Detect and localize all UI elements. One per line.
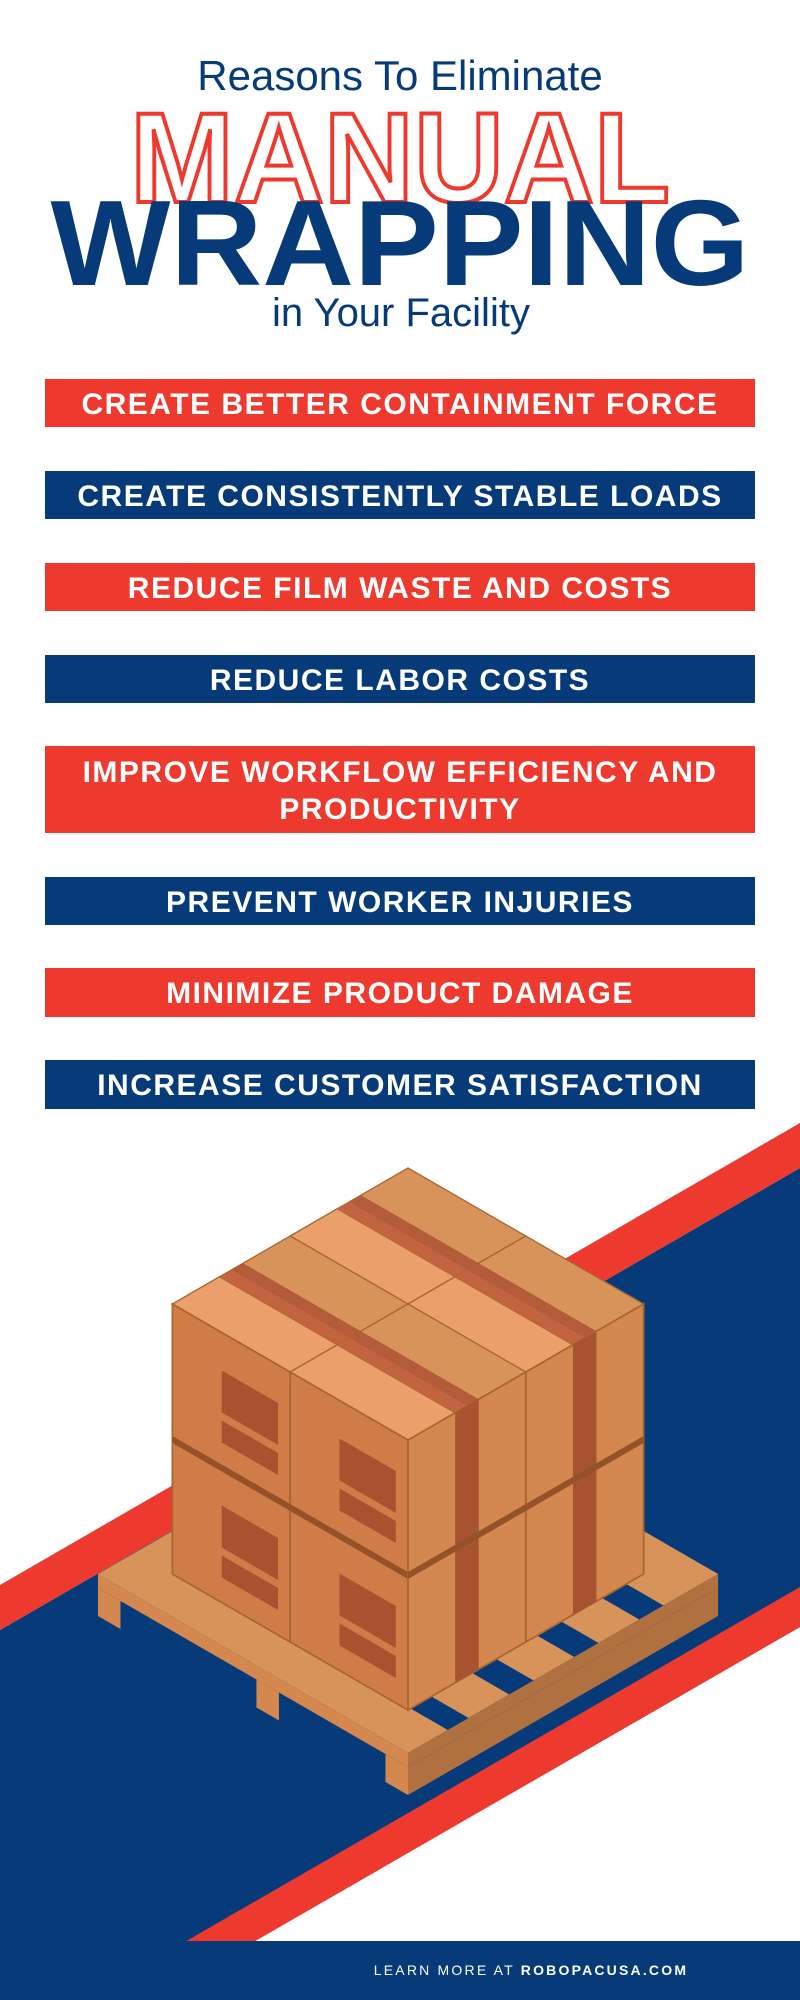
pallet — [98, 1395, 718, 1795]
bar 7 — [45, 968, 755, 1017]
footer text: LEARN MORE AT ROBOPACUSA.COM — [374, 1962, 688, 1978]
bar 8: INCREASE CUSTOMER SATISFACTION — [97, 1069, 703, 1102]
bar 3 — [45, 563, 755, 611]
bar 4: REDUCE LABOR COSTS — [210, 664, 590, 697]
bar 5: PRODUCTIVITY — [279, 793, 521, 826]
illustration: pallet of boxes — [98, 1168, 718, 1795]
heading: WRAPPING: WRAPPING — [50, 175, 750, 311]
bar 6: PREVENT WORKER INJURIES — [166, 886, 634, 919]
boxes top faces — [172, 1168, 644, 1440]
bar 8 — [45, 1060, 755, 1109]
bar 4 — [45, 655, 755, 703]
boxes left faces — [172, 1304, 408, 1710]
bar 2: CREATE CONSISTENTLY STABLE LOADS — [77, 480, 723, 513]
bar 5 — [45, 746, 755, 833]
bar 1: CREATE BETTER CONTAINMENT FORCE — [81, 388, 719, 421]
bar 6 — [45, 877, 755, 925]
bar 3: REDUCE FILM WASTE AND COSTS — [128, 572, 672, 605]
bar 5: IMPROVE WORKFLOW EFFICIENCY AND — [83, 756, 717, 789]
subtitle top: Reasons To Eliminate — [197, 52, 603, 99]
diagonal background stripes — [0, 1123, 800, 2000]
subtitle bottom: in Your Facility — [272, 291, 530, 335]
reasons list — [45, 379, 755, 1109]
bar 2 — [45, 471, 755, 519]
bar 7: MINIMIZE PRODUCT DAMAGE — [166, 977, 634, 1010]
footer bar — [0, 1941, 800, 2000]
title — [50, 52, 750, 335]
boxes right faces — [408, 1304, 644, 1710]
bar 1 — [45, 379, 755, 427]
heading: MANUAL: MANUAL — [130, 87, 670, 230]
